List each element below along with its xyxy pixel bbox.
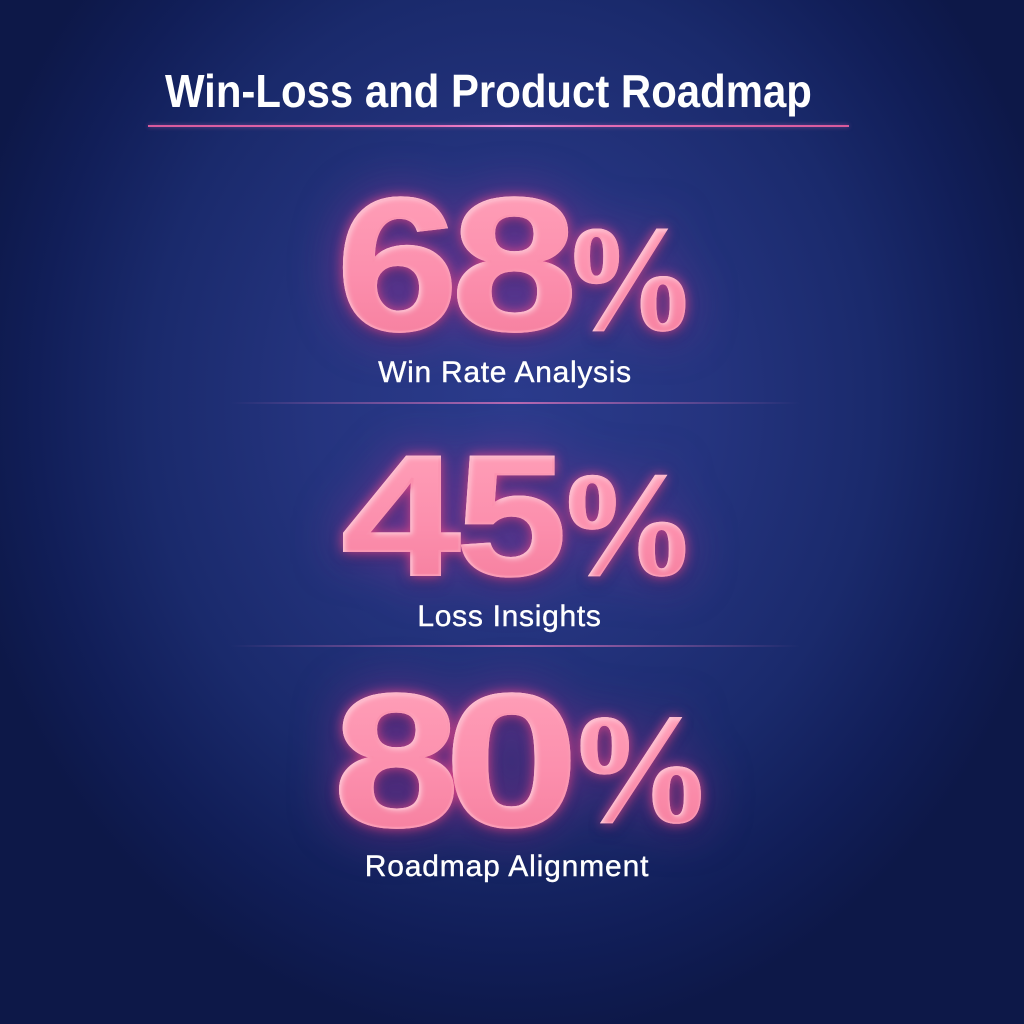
title: Win-Loss and Product Roadmap [165, 65, 812, 117]
label: roadmap alignment: Roadmap Alignment [365, 850, 649, 883]
stat: 68% [316, 159, 704, 371]
stat: 45%: % [555, 442, 698, 606]
stat: 45%: 5 [456, 420, 567, 612]
label: win rate: Win Rate Analysis [378, 356, 632, 389]
stat: 68%: 8 [451, 159, 578, 371]
label: loss insights: Loss Insights [417, 600, 602, 633]
stat: 68%: % [561, 196, 698, 362]
stat: 80%: 8 [333, 655, 460, 867]
stat: 80%: 0 [444, 655, 579, 867]
stat: 80% [315, 655, 722, 867]
stat: 68%: 6 [336, 159, 459, 371]
title underline [148, 125, 849, 127]
stat: 45%: 4 [341, 420, 461, 612]
stat: 80%: % [566, 683, 714, 855]
stat: 45% [324, 420, 704, 612]
